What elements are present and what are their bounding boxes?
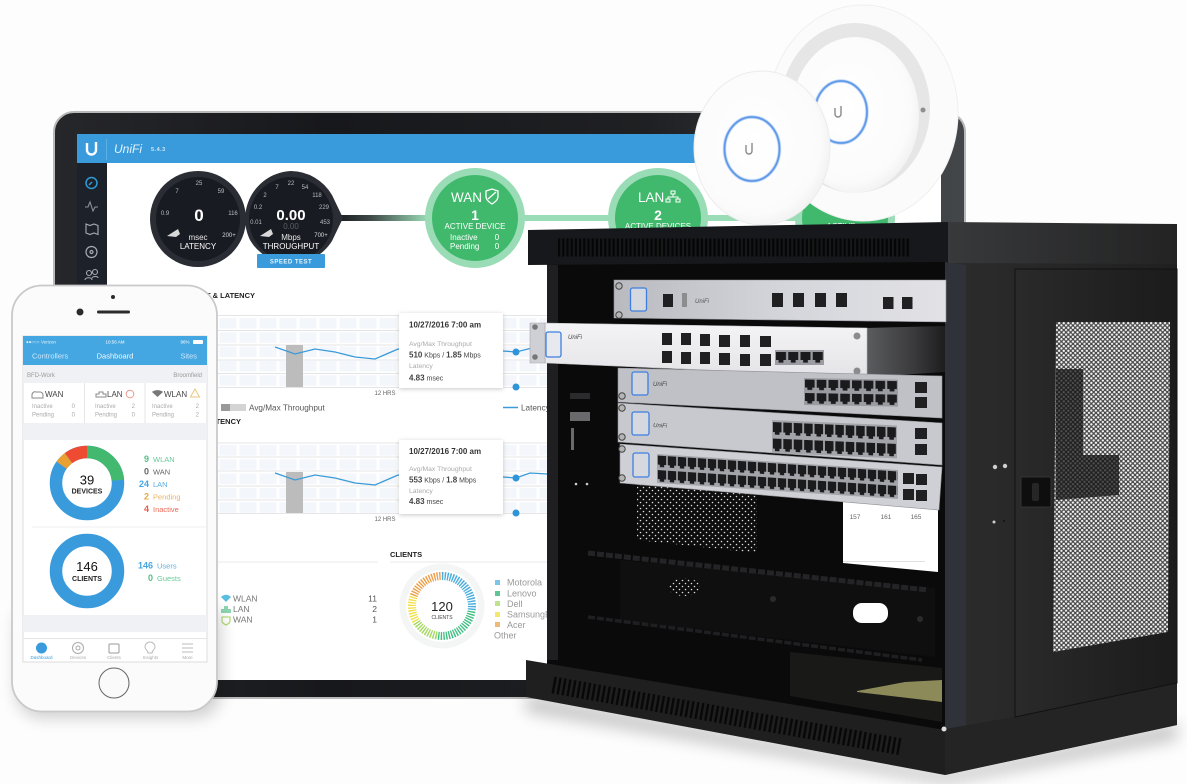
gauge: latency: 0: [194, 206, 204, 225]
icon: dashboard gauge: [86, 178, 97, 188]
device list: 1: [372, 614, 377, 624]
app status row: Inactive: [32, 404, 53, 410]
clients legend: Users: [157, 562, 177, 570]
clients legend: Lenovo: [507, 588, 537, 598]
donut: clients: [56, 540, 118, 602]
devices legend: WLAN: [153, 455, 175, 464]
app site bar: [23, 365, 207, 383]
devices legend: WAN: [153, 468, 170, 476]
app status row: WLAN: [164, 390, 187, 399]
chart: throughput and latency 2: [218, 443, 548, 523]
phone body: [12, 286, 217, 712]
power strip label: [570, 393, 590, 485]
top cap side: [948, 222, 1177, 264]
device list: 2: [372, 604, 377, 614]
gauge: throughput: Mbps: [281, 233, 301, 242]
top vents: [558, 238, 910, 256]
switch: US-24: UniFi: [653, 423, 668, 430]
app status row: [32, 383, 200, 423]
app status row: 2: [196, 404, 200, 410]
gateway: UniFi Security Gateway Pro: UniFi: [695, 299, 710, 305]
app tab bar: Clients: [107, 655, 122, 660]
clients legend: Other: [494, 630, 517, 640]
app tab bar: Insights: [143, 655, 159, 660]
gauge: throughput: 7: [275, 185, 279, 191]
rear mesh panel: [637, 485, 757, 553]
gauge: throughput: 0.00: [276, 207, 306, 224]
status: WAN: 0: [495, 233, 500, 242]
app status row: LAN: [107, 390, 123, 399]
tooltip 1: 4.83 msec: [409, 374, 444, 382]
devices legend: LAN: [153, 480, 168, 489]
devices legend: 2: [144, 492, 149, 502]
tooltip 1: 10/27/2016 7:00 am: [409, 320, 481, 330]
devices legend: 0: [144, 466, 149, 476]
gauge: latency: msec: [188, 233, 208, 242]
app status row: 0: [72, 412, 76, 418]
app gap band: [23, 423, 207, 440]
status: LAN: [608, 168, 708, 268]
door mesh: [1053, 322, 1170, 652]
app gap band: [23, 615, 207, 632]
gauge: latency: 59: [218, 189, 225, 195]
gauge: throughput: 54: [302, 185, 309, 191]
device list: WLAN: [233, 594, 258, 604]
donut: clients: 146: [76, 559, 98, 574]
tooltip 1: [399, 313, 503, 388]
device list: WAN: [233, 614, 253, 624]
gauge: throughput: 229: [319, 205, 330, 211]
donut: clients: [400, 564, 484, 648]
status: WLAN: [795, 168, 895, 268]
donut: devices: DEVICES: [72, 488, 103, 496]
gauge connector: [340, 215, 428, 221]
donut: clients: CLIENTS: [72, 576, 102, 583]
phone: UniFi mobile app: [12, 286, 221, 718]
icon: devices: [86, 246, 97, 258]
app header: [23, 336, 207, 365]
opening showing dashboard: 165: [911, 514, 922, 521]
aggregation switch: ES-16 XG: [530, 323, 945, 377]
switch: US-48: [619, 444, 942, 510]
status: WAN: Inactive: [450, 233, 478, 242]
tooltip 1: 510 Kbps / 1.85 Mbps: [409, 350, 481, 360]
app status row: 2: [132, 404, 136, 410]
app status row: 0: [132, 412, 136, 418]
switch: US-24: [618, 403, 942, 465]
tooltip 2: Latency: [409, 488, 433, 495]
status: LAN: 2: [654, 207, 662, 223]
status: WAN: Pending: [450, 242, 479, 251]
app header: Controllers: [32, 352, 69, 360]
chart: throughput and latency 1: 12 HRS: [374, 391, 396, 397]
rack floor pass-through plate: [857, 680, 942, 702]
devices legend: Inactive: [153, 505, 179, 514]
rack base front face: [526, 660, 945, 775]
chart: throughput and latency 1: [218, 316, 548, 397]
gauge: latency: 116: [228, 211, 238, 217]
opening showing dashboard: [843, 500, 938, 572]
rack right side: [945, 262, 1177, 775]
tooltip 1: Latency: [409, 363, 433, 370]
icon: statistics pulse: [85, 202, 98, 211]
devices legend: 4: [144, 504, 149, 514]
status: LAN: ACTIVE DEVICES: [625, 222, 691, 231]
donut: devices: [56, 452, 118, 514]
gauge: latency: 0.9: [161, 211, 170, 217]
app status row: Pending: [95, 412, 117, 418]
status: WAN: ACTIVE DEVICE: [445, 222, 505, 231]
device list: 11: [368, 594, 377, 604]
gauge: throughput: 0.2: [254, 205, 263, 211]
devices legend: [139, 454, 181, 514]
devices legend: 24: [139, 479, 149, 489]
app site bar: BFD-Work: [27, 373, 56, 379]
gauge: throughput: THROUGHPUT: [263, 242, 319, 251]
clients heading: CLIENTS: [390, 550, 422, 559]
app status row: Inactive: [152, 404, 173, 410]
phone shadow: [16, 600, 221, 718]
clients legend: [494, 578, 551, 640]
door latch: [1021, 477, 1051, 507]
status: LAN: LAN: [638, 190, 664, 205]
side rivets: [992, 464, 1007, 524]
devices legend: 9: [144, 454, 149, 464]
clients legend: SamsungE: [507, 610, 551, 620]
tooltip 1: Avg/Max Throughput: [409, 341, 472, 348]
header bar: [77, 134, 941, 163]
cable manager cutouts: [668, 578, 700, 596]
gauge: throughput: 453: [320, 220, 331, 226]
header bar: 5.4.3: [151, 147, 166, 153]
donut: clients: CLIENTS: [431, 615, 453, 621]
tooltip 2: 4.83 msec: [409, 497, 444, 506]
camera and speaker: [76, 295, 130, 316]
heading: second chart: LATENCY: [206, 417, 241, 426]
gauge: latency: 25: [196, 181, 203, 187]
app header: ●●○○○ Verizon: [26, 340, 56, 344]
screen: [77, 134, 941, 680]
icon: clients: [85, 270, 98, 280]
switch: US-16-150W: UniFi: [653, 382, 668, 388]
gauge: latency: [150, 171, 246, 267]
base vents: [553, 685, 902, 747]
rack interior: [547, 262, 948, 735]
app tab bar: [23, 638, 207, 660]
chart legend: [221, 404, 551, 412]
gauge: latency: 200+: [222, 233, 236, 239]
icon: map: [86, 224, 98, 234]
app status row: 2: [196, 412, 200, 418]
tooltip 2: 553 Kbps / 1.8 Mbps: [409, 476, 477, 484]
rack floor shadow: [526, 694, 1177, 784]
speed test button: SPEED TEST: [270, 260, 312, 266]
tablet body: [54, 112, 965, 698]
wall-mount rack enclosure: [526, 222, 1177, 775]
tooltip 2: [399, 440, 503, 514]
card divider: [32, 526, 207, 528]
gauge: latency: LATENCY: [180, 242, 217, 251]
heading: throughput and latency: THROUGHPUT & LATENCY: [158, 291, 255, 300]
status: WAN: 0: [495, 242, 500, 251]
rack base right face: [945, 683, 1177, 775]
clients legend: Motorola: [507, 578, 542, 588]
gauge: throughput: [245, 171, 343, 264]
app header: Sites: [180, 352, 197, 360]
status: WAN: [425, 168, 525, 268]
opening showing dashboard: 157: [850, 514, 861, 521]
app status row: WAN: [45, 390, 64, 399]
tooltip 2: Avg/Max Throughput: [409, 466, 472, 473]
tablet: UniFi controller: [54, 112, 965, 698]
clients legend: Acer: [507, 620, 526, 630]
rack floor: [790, 652, 942, 722]
access point: small, front: [694, 71, 830, 225]
devices legend: Pending: [153, 492, 181, 502]
gauge: throughput: 2: [263, 193, 267, 199]
app status row: Pending: [32, 412, 54, 418]
rack left post: [547, 265, 558, 660]
right column: [945, 262, 966, 730]
speed test button: [257, 254, 325, 268]
tooltip 2: 10/27/2016 7:00 am: [409, 447, 481, 456]
gauge: throughput: 118: [312, 193, 322, 199]
donut: devices: 39: [80, 472, 94, 488]
chart legend: Latency: [521, 404, 551, 412]
app site bar: Broomfield: [173, 373, 202, 379]
app status row: Inactive: [95, 404, 116, 410]
cable manager: [588, 553, 935, 660]
shadow through mesh: [1056, 369, 1119, 500]
status: WAN: WAN: [451, 190, 482, 205]
home button: [99, 668, 129, 698]
app tab bar: Dashboard: [30, 655, 53, 660]
app status row: 0: [72, 404, 76, 410]
donut: clients: 120: [431, 599, 453, 614]
chart: throughput and latency 2: 12 HRS: [374, 517, 396, 523]
clients legend: Guests: [157, 574, 181, 583]
app header: Dashboard: [97, 352, 133, 360]
device list: [218, 562, 378, 625]
clients legend: Dell: [507, 599, 523, 609]
rack top cap: [528, 222, 948, 265]
app header: 10:56 AM: [105, 340, 125, 344]
clients legend: [138, 560, 181, 583]
gauge: latency: 7: [175, 189, 179, 195]
clients legend: 0: [148, 573, 153, 583]
status: WAN: 1: [471, 207, 479, 223]
door: [1015, 269, 1177, 717]
chart legend: Avg/Max Throughput: [249, 404, 325, 412]
clients legend: 146: [138, 560, 153, 570]
app tab bar: More: [182, 655, 193, 660]
gauge: throughput: 0.01: [250, 220, 262, 226]
gauge: throughput: 700+: [314, 233, 328, 239]
app status row: Pending: [152, 412, 174, 418]
status: WLAN: ACTIVE: [827, 222, 855, 231]
gateway: UniFi Security Gateway Pro: [614, 280, 946, 322]
access point: large, rear: [768, 5, 958, 221]
sidebar: [77, 163, 107, 293]
device list: LAN: [233, 604, 250, 614]
app header: 96%: [180, 340, 190, 344]
app tab bar: Devices: [70, 655, 87, 660]
switch: US-16-150W: [618, 368, 942, 418]
aggregation switch: ES-16 XG: UniFi: [568, 335, 583, 341]
opening showing dashboard: 161: [881, 514, 892, 521]
gauge: throughput: 22: [288, 181, 295, 187]
gauge: throughput: 0.00: [283, 222, 299, 231]
phone screen: [23, 336, 207, 662]
header bar: UniFi: [114, 142, 142, 156]
